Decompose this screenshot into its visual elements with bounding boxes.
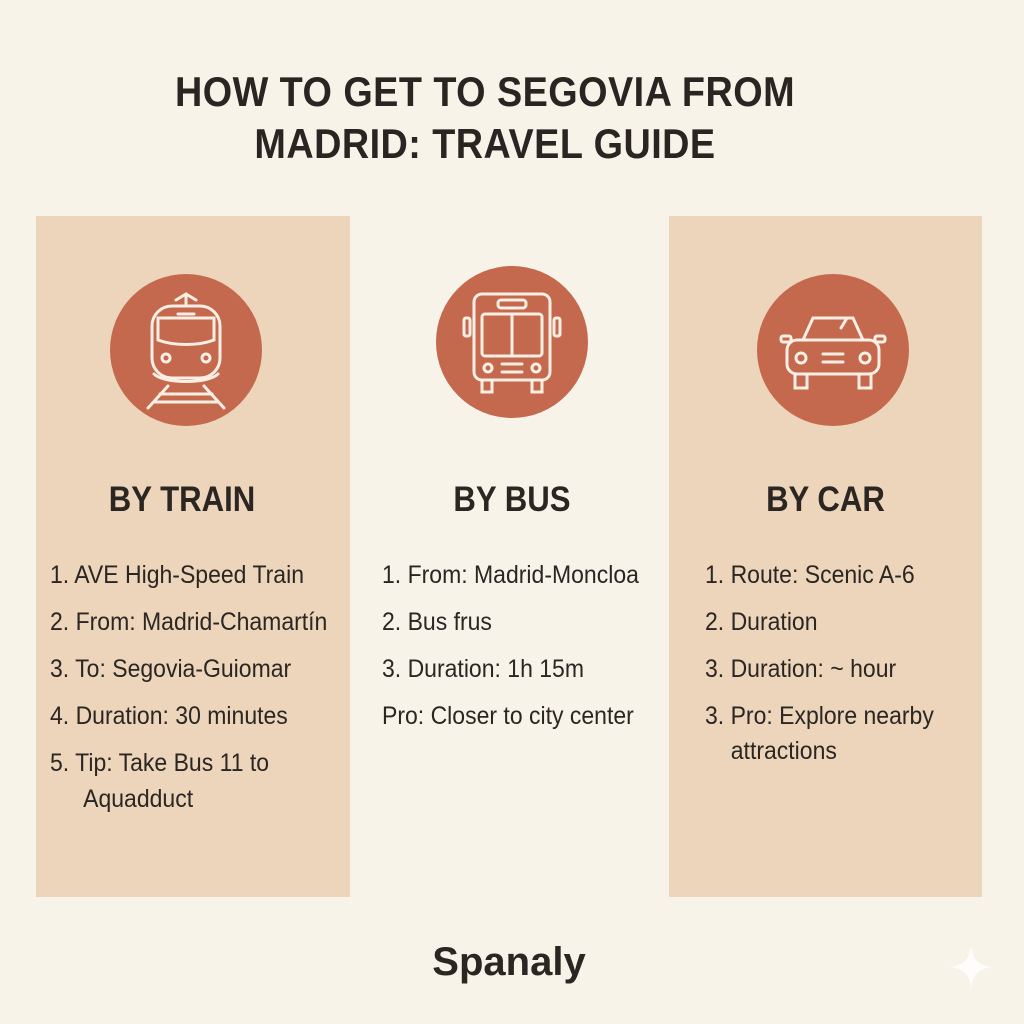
list: train: 5. Tip: Take Bus 11 to <box>50 749 269 777</box>
list: bus: 1. From: Madrid-Moncloa <box>382 561 639 589</box>
list: car: 2. Duration <box>705 608 818 636</box>
title <box>175 68 795 167</box>
list: car: 3. Pro: Explore nearby <box>705 702 934 730</box>
icon: train <box>110 274 262 426</box>
list: car: 3. Duration: ~ hour <box>705 655 896 683</box>
list: bus <box>382 561 639 730</box>
footer brand: Spanaly <box>432 940 586 984</box>
panel: train <box>36 216 350 897</box>
title: MADRID: TRAVEL GUIDE <box>254 120 716 167</box>
list: train: 4. Duration: 30 minutes <box>50 702 288 730</box>
icon: car <box>757 274 909 426</box>
list: train: 1. AVE High-Speed Train <box>50 561 304 589</box>
heading: by car: BY CAR <box>766 480 885 519</box>
list: bus: Pro: Closer to city center <box>382 702 634 730</box>
list: car <box>705 561 934 765</box>
icon: bus <box>436 266 588 418</box>
icon: sparkle <box>952 948 990 986</box>
list: car: 1. Route: Scenic A-6 <box>705 561 915 589</box>
title: HOW TO GET TO SEGOVIA FROM <box>175 68 795 115</box>
list: bus: 3. Duration: 1h 15m <box>382 655 584 683</box>
list: bus: 2. Bus frus <box>382 608 492 636</box>
heading: by bus: BY BUS <box>453 480 571 519</box>
list: train: 3. To: Segovia-Guiomar <box>50 655 291 683</box>
panel: car <box>669 216 982 897</box>
heading: by train: BY TRAIN <box>109 480 255 519</box>
list: train: Aquadduct <box>83 785 193 813</box>
list: car: attractions <box>731 737 837 765</box>
list: train <box>50 561 327 813</box>
list: train: 2. From: Madrid-Chamartín <box>50 608 327 636</box>
